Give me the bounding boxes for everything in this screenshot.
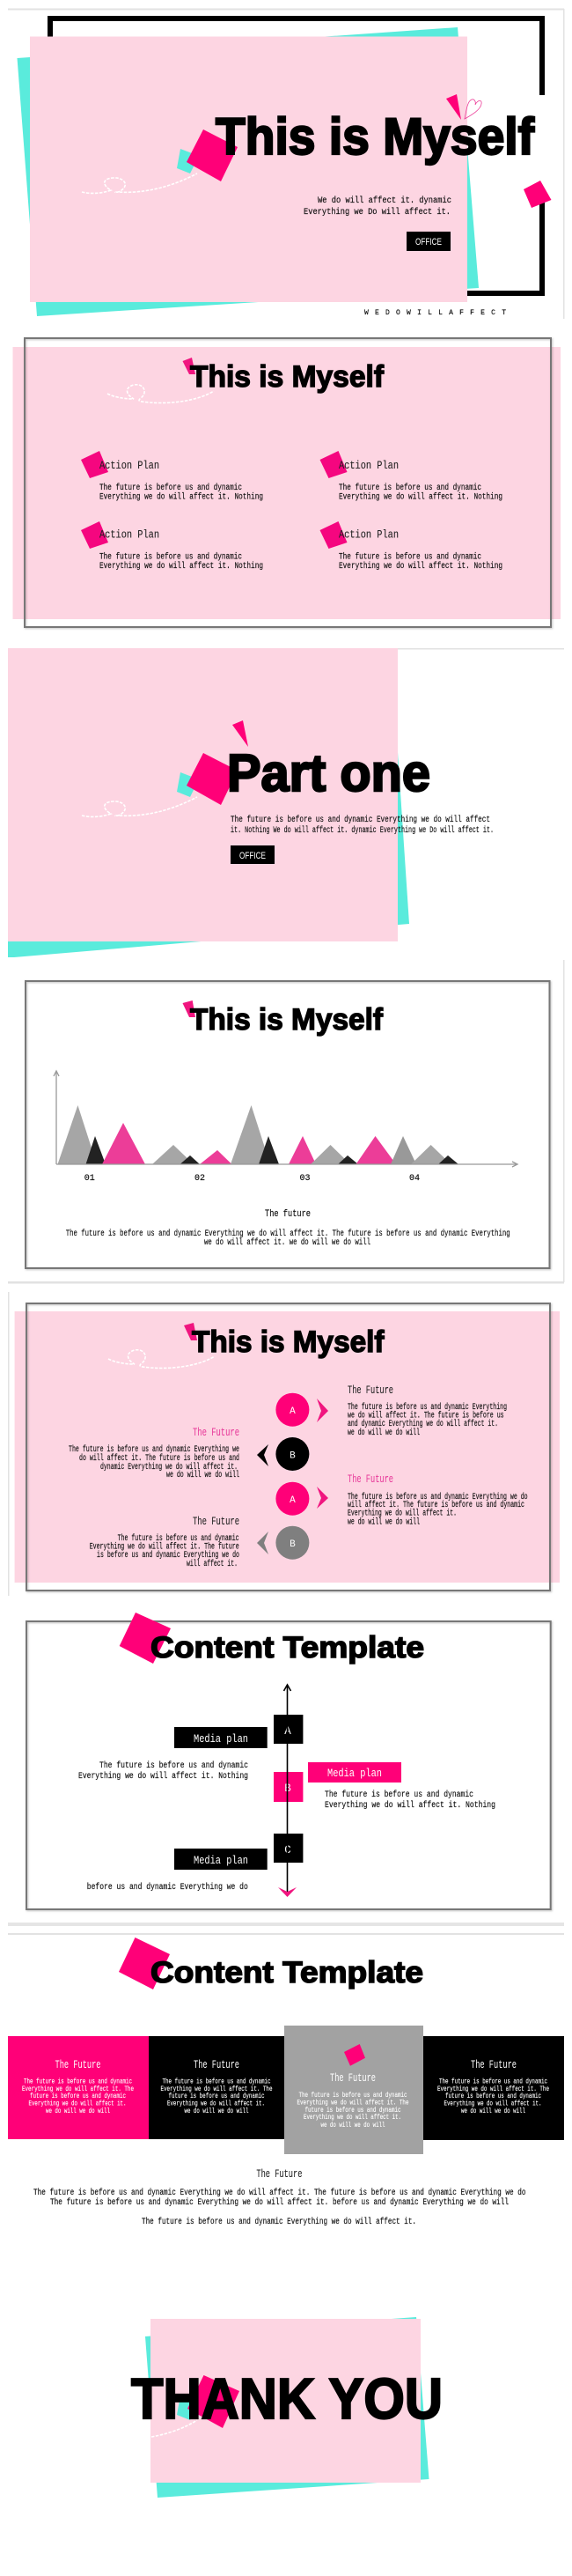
card 1 pink: Everything we do will affect it. The xyxy=(22,2085,134,2093)
label: media plan A: Media plan xyxy=(194,1733,248,1746)
text block: upper left: The future is before us and dynamic Everything we xyxy=(69,1444,239,1455)
pink band xyxy=(15,1311,560,1583)
item: action plan 2 xyxy=(320,451,502,503)
item: action plan 3 xyxy=(81,521,263,572)
text block: top right xyxy=(348,1384,507,1438)
heading: Content Template xyxy=(150,1631,424,1664)
node: B grey xyxy=(257,1526,309,1560)
card 3 grey xyxy=(284,2026,423,2154)
axis labels: 02 xyxy=(194,1174,205,1184)
caption text xyxy=(66,1229,510,1248)
card 2 black: The future is before us and dynamic xyxy=(162,2077,271,2085)
caption heading: The future xyxy=(265,1209,311,1220)
panel: thank you slide xyxy=(131,2317,443,2498)
text block B: The future is before us and dynamic xyxy=(325,1790,473,1800)
card 1 pink xyxy=(8,2036,149,2139)
pink band xyxy=(12,347,561,619)
label: media plan B: Media plan xyxy=(327,1768,382,1780)
teal tilted sheet xyxy=(8,661,409,957)
outline frame xyxy=(25,338,551,627)
card 1 pink: Everything we do will affect it. xyxy=(28,2100,127,2108)
caption text: we do will affect it. we do will we do will xyxy=(204,1237,370,1248)
label: media plan C xyxy=(174,1849,268,1870)
icon: pink triangle xyxy=(446,94,461,120)
heading: Content Template xyxy=(150,1956,423,1989)
node: A pink top xyxy=(275,1393,328,1427)
description text: The future is before us and dynamic Everything we do will affect xyxy=(231,815,490,825)
axis labels: 03 xyxy=(299,1174,311,1184)
card 3 grey: future is before us and dynamic xyxy=(304,2106,401,2115)
panel: ABAB slide xyxy=(15,1303,560,1591)
text block A: Everything we do will affect it. Nothing xyxy=(78,1771,248,1782)
text block: lower right xyxy=(348,1473,528,1528)
text block: upper left: we do will we do will xyxy=(166,1470,239,1480)
node: B black xyxy=(257,1437,309,1471)
office button: OFFICE xyxy=(239,851,266,861)
item: action plan 1 xyxy=(81,451,263,503)
step square C: C xyxy=(284,1844,291,1856)
node: B black: B xyxy=(290,1451,296,1462)
item: action plan 2: Action Plan xyxy=(339,460,399,472)
axis labels xyxy=(84,1174,420,1184)
text block C: before us and dynamic Everything we do xyxy=(87,1882,248,1893)
icon: pink accent xyxy=(183,1000,195,1017)
item: action plan 3: Action Plan xyxy=(99,528,159,541)
subtitle text xyxy=(304,196,451,218)
step square A xyxy=(274,1715,303,1744)
text block: upper left: do will affect it. The future is before us and xyxy=(79,1453,239,1464)
card 4 black: we do will we do will xyxy=(461,2107,525,2115)
text block: top right: The Future xyxy=(348,1384,393,1397)
text block: lower left: The Future xyxy=(193,1516,239,1528)
panel: cover slide xyxy=(18,18,551,317)
node: A pink lower: A xyxy=(290,1495,296,1506)
axis labels: 01 xyxy=(84,1174,95,1184)
card 4 black: The Future xyxy=(471,2059,517,2071)
card 1 pink: future is before us and dynamic xyxy=(30,2092,126,2100)
card 2 black: Everything we do will affect it. xyxy=(167,2100,265,2108)
text block A: The future is before us and dynamic xyxy=(99,1760,248,1771)
card 2 black: future is before us and dynamic xyxy=(169,2092,264,2100)
chart axes xyxy=(54,1071,517,1167)
text block: lower left xyxy=(90,1516,239,1569)
text block: lower right: The Future xyxy=(348,1473,393,1486)
text block: upper left: The Future xyxy=(193,1427,239,1439)
card 1 pink: The Future xyxy=(55,2059,100,2071)
heading: THANK YOU xyxy=(131,2366,443,2431)
dashed flight path xyxy=(82,173,197,193)
text block: lower left: is before us and dynamic Everything we do xyxy=(97,1550,239,1561)
title: This is Myself xyxy=(216,108,535,166)
card 2 black: we do will we do will xyxy=(185,2107,248,2115)
item: action plan 4 xyxy=(320,521,502,572)
item: action plan 1: Action Plan xyxy=(99,460,159,472)
icon: pink triangle xyxy=(232,720,248,747)
item: action plan 4: The future is before us and dynamic xyxy=(339,551,481,562)
panel: four cards slide xyxy=(8,1938,564,2227)
text block: top right: we do will we do will xyxy=(348,1428,420,1438)
dashed flight path xyxy=(151,2420,197,2437)
icon: pink square xyxy=(187,753,238,805)
card 3 grey: Everything we do will affect it. The xyxy=(297,2099,408,2107)
icon: pink square xyxy=(119,1938,170,1989)
label: media plan A xyxy=(174,1727,268,1748)
panel: media plan timeline slide xyxy=(26,1613,551,1909)
card 4 black xyxy=(423,2036,564,2140)
label: media plan C: Media plan xyxy=(194,1855,248,1867)
text block B: Everything we do will affect it. Nothing xyxy=(325,1800,495,1811)
icon: teal square xyxy=(177,772,199,797)
item: action plan 4: Action Plan xyxy=(339,528,399,541)
pink sheet xyxy=(8,648,398,941)
icon: pink square xyxy=(187,2375,239,2428)
node: B grey: B xyxy=(290,1539,296,1550)
panel: part one slide xyxy=(8,648,494,957)
dashed flight path xyxy=(82,797,197,816)
step square B xyxy=(274,1772,303,1802)
icon: small pink square xyxy=(524,181,551,208)
office button xyxy=(407,232,451,251)
item: action plan 3: The future is before us and dynamic xyxy=(99,551,242,562)
caption text: The future is before us and dynamic Everything we do will affect it. xyxy=(142,2217,416,2227)
pink sheet xyxy=(150,2319,421,2483)
card 3 grey: The future is before us and dynamic xyxy=(299,2091,407,2100)
caption heading: The Future xyxy=(256,2168,302,2181)
teal tilted sheet xyxy=(18,27,479,316)
outline frame xyxy=(26,1303,550,1591)
caption text xyxy=(33,2188,526,2227)
pink sheet xyxy=(30,37,467,302)
axis labels: 04 xyxy=(409,1174,420,1184)
description text xyxy=(231,815,494,836)
icon: pink accent xyxy=(184,1323,197,1340)
icon: heart outline xyxy=(465,100,481,119)
step square C xyxy=(274,1834,303,1863)
outline frame xyxy=(26,1621,551,1909)
text block: lower right: we do will we do will xyxy=(348,1517,420,1528)
teal tilted sheet xyxy=(145,2317,429,2498)
subtitle text: We do will affect it. dynamic xyxy=(318,196,451,206)
item: action plan 1: The future is before us and dynamic xyxy=(99,483,242,493)
office button xyxy=(231,845,275,864)
outline frame xyxy=(26,981,549,1268)
spaced caption: WEDOWILLAFFECT xyxy=(364,309,506,317)
text block: lower left: will affect it. xyxy=(187,1559,238,1569)
text block: upper left: dynamic Everything we do will affect it. xyxy=(100,1462,238,1473)
office button: OFFICE xyxy=(415,237,442,247)
black frame xyxy=(50,18,542,293)
text block: upper left xyxy=(69,1427,239,1480)
item: action plan 1: Everything we do will affect it. Nothing xyxy=(99,492,263,503)
icon: teal square xyxy=(177,2395,199,2420)
heading: This is Myself xyxy=(190,1003,384,1037)
node: A pink lower xyxy=(275,1482,328,1516)
text block: lower left: The future is before us and dynamic xyxy=(118,1533,239,1544)
text block: lower left: Everything we do will affect it. The future xyxy=(90,1542,239,1553)
card 3 grey: Everything we do will affect it. xyxy=(304,2113,401,2122)
triangle area chart xyxy=(58,1105,458,1164)
panel: action plans slide xyxy=(12,338,561,627)
label: media plan B xyxy=(308,1762,401,1783)
heading: Part one xyxy=(227,744,430,802)
card 2 black: Everything we do will affect it. The xyxy=(160,2085,273,2093)
text block: lower right: Everything we do will affect it. xyxy=(348,1509,457,1519)
node: A pink top: A xyxy=(290,1406,296,1417)
subtitle text: Everything we Do will affect it. xyxy=(304,207,451,218)
heading: This is Myself xyxy=(192,1325,385,1359)
icon: pink square xyxy=(120,1613,171,1664)
dashed flight path xyxy=(107,385,214,402)
card 1 pink: we do will we do will xyxy=(46,2107,110,2115)
icon: pink accent xyxy=(183,358,195,374)
icon: pink chevron xyxy=(278,1887,297,1897)
text block A xyxy=(78,1760,248,1782)
item: action plan 3: Everything we do will affect it. Nothing xyxy=(99,561,263,572)
dashed flight path xyxy=(108,1350,215,1368)
timeline arrow xyxy=(283,1685,290,1893)
text block B xyxy=(325,1790,495,1811)
card 3 grey: we do will we do will xyxy=(320,2121,385,2129)
item: action plan 4: Everything we do will affect it. Nothing xyxy=(339,561,502,572)
item: action plan 2: The future is before us and dynamic xyxy=(339,483,481,493)
step square B: B xyxy=(284,1783,291,1795)
panel: chart slide xyxy=(26,981,549,1268)
heading: This is Myself xyxy=(190,360,385,394)
icon: pink square xyxy=(187,129,238,181)
item: action plan 2: Everything we do will affect it. Nothing xyxy=(339,492,502,503)
card 1 pink: The future is before us and dynamic xyxy=(24,2077,132,2085)
card 2 black xyxy=(149,2036,284,2139)
icon: teal square xyxy=(177,149,199,173)
card 3 grey: The Future xyxy=(330,2072,376,2085)
step square A: A xyxy=(284,1725,291,1738)
card 2 black: The Future xyxy=(194,2059,239,2071)
